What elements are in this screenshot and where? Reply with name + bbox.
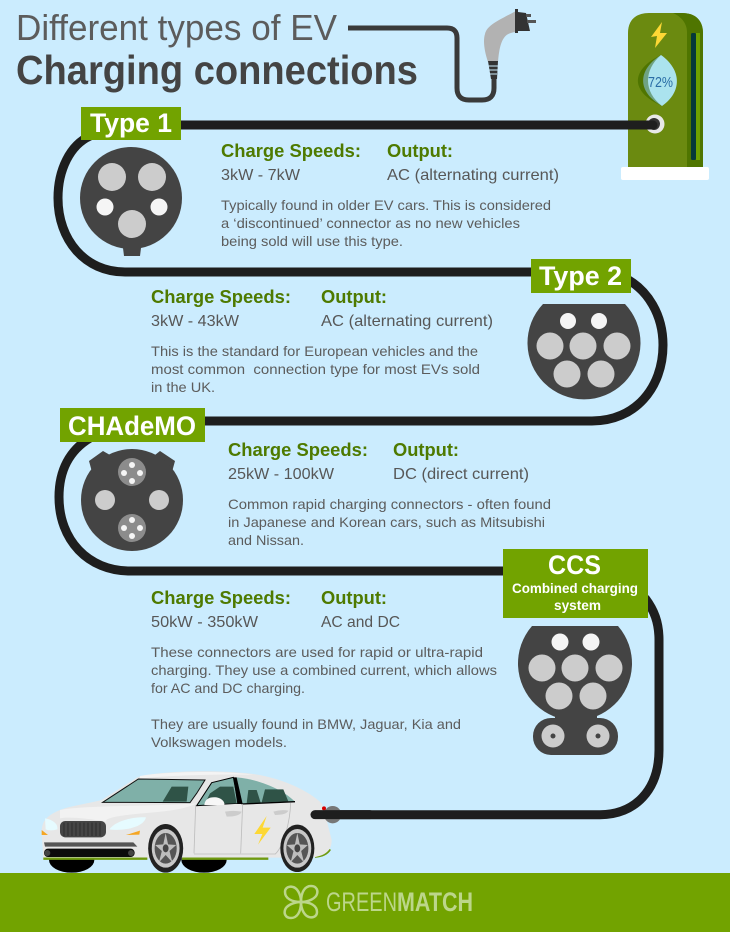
- text: Type 2 details: most common connection type for most EVs sold: [151, 361, 480, 377]
- cable: main route: [58, 125, 663, 815]
- icon: charging station: 72%: [648, 74, 673, 91]
- icon: charging socket: [646, 114, 664, 134]
- icon: charging station: [621, 13, 709, 180]
- icon: CHAdeMO connector: [81, 449, 183, 551]
- logo: GreenMatch: [285, 886, 473, 918]
- text: CCS details: 50kW - 350kW: [151, 614, 259, 631]
- icon: Type 2 connector: [528, 304, 640, 399]
- text: CCS details: Output:: [321, 588, 387, 608]
- label: Type 2: Type 2: [539, 261, 622, 291]
- title: Different types of EV: [16, 7, 337, 48]
- text: CCS details: Volkswagen models.: [151, 734, 287, 750]
- text: CHAdeMO details: Charge Speeds:: [228, 440, 368, 460]
- text: Type 1 details: [221, 141, 559, 249]
- label: CCS: Combined charging: [512, 580, 638, 596]
- text: Type 2 details: AC (alternating current): [321, 313, 493, 330]
- text: Type 1 details: AC (alternating current): [387, 167, 559, 184]
- label: Type 1: Type 1: [90, 108, 172, 138]
- text: Type 2 details: in the UK.: [151, 379, 215, 395]
- text: CCS details: Charge Speeds:: [151, 588, 291, 608]
- icon: Type 1 connector: [80, 147, 182, 256]
- text: CCS details: charging. They use a combined current, which allows: [151, 662, 497, 678]
- text: Type 1 details: a ‘discontinued’ connector as no new vehicles: [221, 215, 520, 231]
- text: Type 1 details: being sold will use this type.: [221, 233, 403, 249]
- text: Type 2 details: Output:: [321, 287, 387, 307]
- icon: CCS connector: [518, 626, 632, 755]
- panel: Type 1: [80, 107, 559, 256]
- text: CHAdeMO details: and Nissan.: [228, 532, 304, 548]
- text: CHAdeMO details: Output:: [393, 440, 459, 460]
- text: CCS details: AC and DC: [321, 614, 400, 631]
- text: Type 1 details: Output:: [387, 141, 453, 161]
- text: CCS details: [151, 588, 497, 750]
- text: CCS details: They are usually found in BMW, Jaguar, Kia and: [151, 716, 461, 732]
- label: CCS: [503, 549, 648, 618]
- footer band: [0, 873, 730, 932]
- text: Type 2 details: [151, 287, 493, 395]
- text: Type 2 details: 3kW - 43kW: [151, 313, 240, 330]
- panel: CHAdeMO: [60, 408, 551, 551]
- panel: CCS: [151, 549, 648, 755]
- text: Type 2 details: This is the standard for European vehicles and the: [151, 343, 478, 359]
- panel: Type 2: [151, 259, 640, 399]
- text: Type 2 details: Charge Speeds:: [151, 287, 291, 307]
- title: Charging connections: [16, 47, 418, 93]
- label: CHAdeMO: CHAdeMO: [68, 411, 196, 441]
- label: CCS: system: [554, 597, 601, 613]
- text: Type 1 details: Typically found in older EV cars. This is considered: [221, 197, 551, 213]
- label: CCS: CCS: [548, 550, 601, 580]
- text: CHAdeMO details: [228, 440, 551, 548]
- text: wordmark: GREEN: [326, 887, 397, 917]
- icon: electric car: [42, 771, 370, 873]
- text: Type 1 details: Charge Speeds:: [221, 141, 361, 161]
- text: CCS details: These connectors are used for rapid or ultra-rapid: [151, 644, 483, 660]
- text: CHAdeMO details: Common rapid charging connectors - often found: [228, 496, 551, 512]
- title: [16, 7, 418, 93]
- icon: clover: [285, 886, 317, 918]
- text: CHAdeMO details: in Japanese and Korean cars, such as Mitsubishi: [228, 514, 545, 530]
- text: Type 1 details: 3kW - 7kW: [221, 167, 301, 184]
- icon: plug with cable: [348, 9, 536, 100]
- logo: GreenMatch: MATCH: [397, 887, 473, 917]
- text: CHAdeMO details: 25kW - 100kW: [228, 466, 335, 483]
- text: CHAdeMO details: DC (direct current): [393, 466, 529, 483]
- text: CCS details: for AC and DC charging.: [151, 680, 305, 696]
